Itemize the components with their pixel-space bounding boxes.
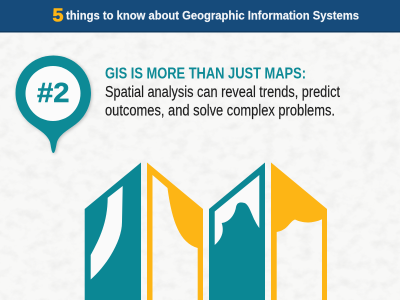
white road shape <box>91 186 123 280</box>
white area <box>215 175 259 245</box>
icon: map pin <box>16 56 91 153</box>
map panel 3: teal <box>209 162 265 300</box>
map panel 4: yellow <box>271 162 327 300</box>
header banner <box>0 0 400 32</box>
pin label: #2 <box>37 77 70 108</box>
body text <box>105 84 341 120</box>
map panel 1: teal <box>85 162 141 300</box>
map panel 2: yellow <box>147 162 203 300</box>
heading: GIS IS MORE THAN JUST MAPS: <box>105 66 306 82</box>
header title: things to know about Geographic Information Systems <box>66 8 359 22</box>
body text: Spatial analysis can reveal trends, predict <box>105 84 341 101</box>
body text: outcomes, and solve complex problems. <box>105 102 335 120</box>
header number: 5 <box>52 6 64 26</box>
